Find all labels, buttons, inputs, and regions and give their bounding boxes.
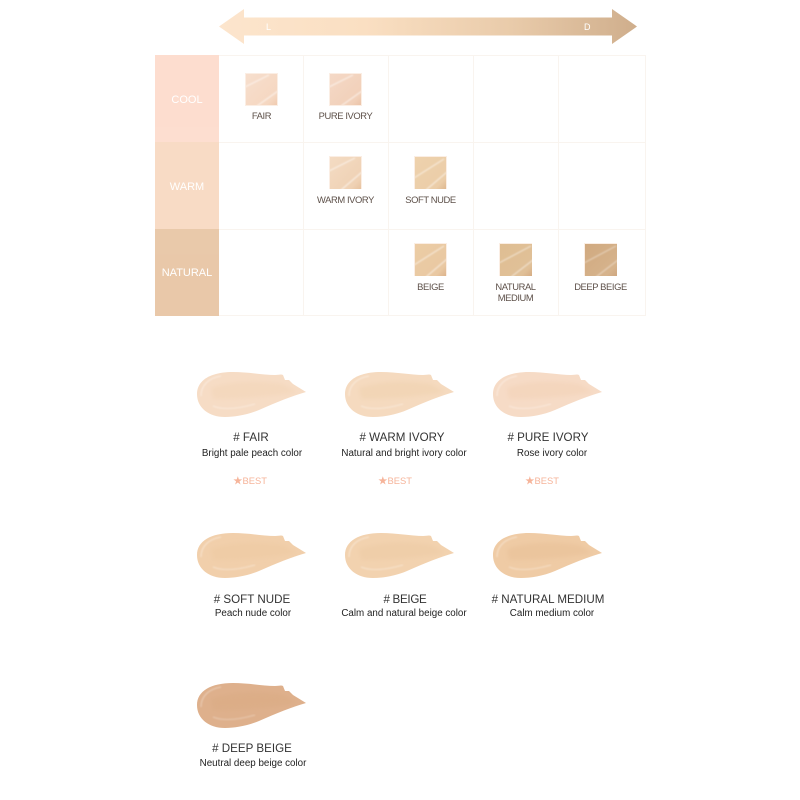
smear: SOFT NUDE [197, 533, 306, 578]
badge: BEST WARM IVORY: ★BEST [378, 475, 412, 486]
swatch: FAIR [245, 73, 278, 106]
row label: COOL [155, 55, 219, 142]
smear: NATURAL MEDIUM [493, 533, 602, 578]
heading: NATURAL MEDIUM: # NATURAL MEDIUM [492, 593, 604, 606]
label: SOFT NUDE: SOFT NUDE [405, 194, 456, 205]
swatch: DEEP BEIGE [584, 243, 617, 276]
smear: WARM IVORY [345, 372, 454, 417]
row label: WARM [155, 142, 219, 229]
label: PURE IVORY: PURE IVORY [319, 110, 372, 121]
smear: FAIR [197, 372, 306, 417]
smear: DEEP BEIGE [197, 683, 306, 728]
swatch: BEIGE [414, 243, 447, 276]
badge: BEST PURE IVORY: ★BEST [525, 475, 559, 486]
smear: PURE IVORY [493, 372, 602, 417]
heading: WARM IVORY: # WARM IVORY [359, 431, 445, 444]
swatch: WARM IVORY [329, 156, 362, 189]
smear: BEIGE [345, 533, 454, 578]
description: PURE IVORY: Rose ivory color [517, 448, 587, 459]
description: BEIGE: Calm and natural beige color [341, 608, 467, 619]
swatch: SOFT NUDE [414, 156, 447, 189]
label: NATURAL MEDIUM: NATURAL [495, 281, 536, 292]
heading: FAIR: # FAIR [233, 431, 269, 444]
label: BEIGE: BEIGE [417, 281, 444, 292]
description: FAIR: Bright pale peach color [202, 448, 302, 459]
arrow: light to dark scale: D [584, 22, 591, 32]
label: FAIR: FAIR [252, 110, 271, 121]
label: WARM IVORY: WARM IVORY [317, 194, 374, 205]
arrow: light to dark scale: L [266, 22, 271, 32]
label: NATURAL MEDIUM [495, 281, 536, 303]
tone grid table [219, 55, 646, 316]
heading: DEEP BEIGE: # DEEP BEIGE [212, 742, 292, 755]
description: NATURAL MEDIUM: Calm medium color [510, 608, 594, 619]
row label: NATURAL [155, 229, 219, 316]
heading: PURE IVORY: # PURE IVORY [508, 431, 588, 444]
description: SOFT NUDE: Peach nude color [215, 608, 291, 619]
swatch: PURE IVORY [329, 73, 362, 106]
label: NATURAL MEDIUM: MEDIUM [498, 292, 533, 303]
heading: BEIGE: # BEIGE [383, 593, 426, 606]
description: WARM IVORY: Natural and bright ivory color [341, 448, 467, 459]
heading: SOFT NUDE: # SOFT NUDE [214, 593, 290, 606]
row label: NATURAL: NATURAL [162, 267, 212, 279]
arrow: light to dark scale [219, 9, 637, 44]
badge: BEST FAIR: ★BEST [233, 475, 267, 486]
swatch: NATURAL MEDIUM [499, 243, 532, 276]
description: DEEP BEIGE: Neutral deep beige color [200, 758, 306, 769]
row label: COOL: COOL [171, 94, 203, 106]
row label: WARM: WARM [170, 181, 204, 193]
label: DEEP BEIGE: DEEP BEIGE [574, 281, 627, 292]
